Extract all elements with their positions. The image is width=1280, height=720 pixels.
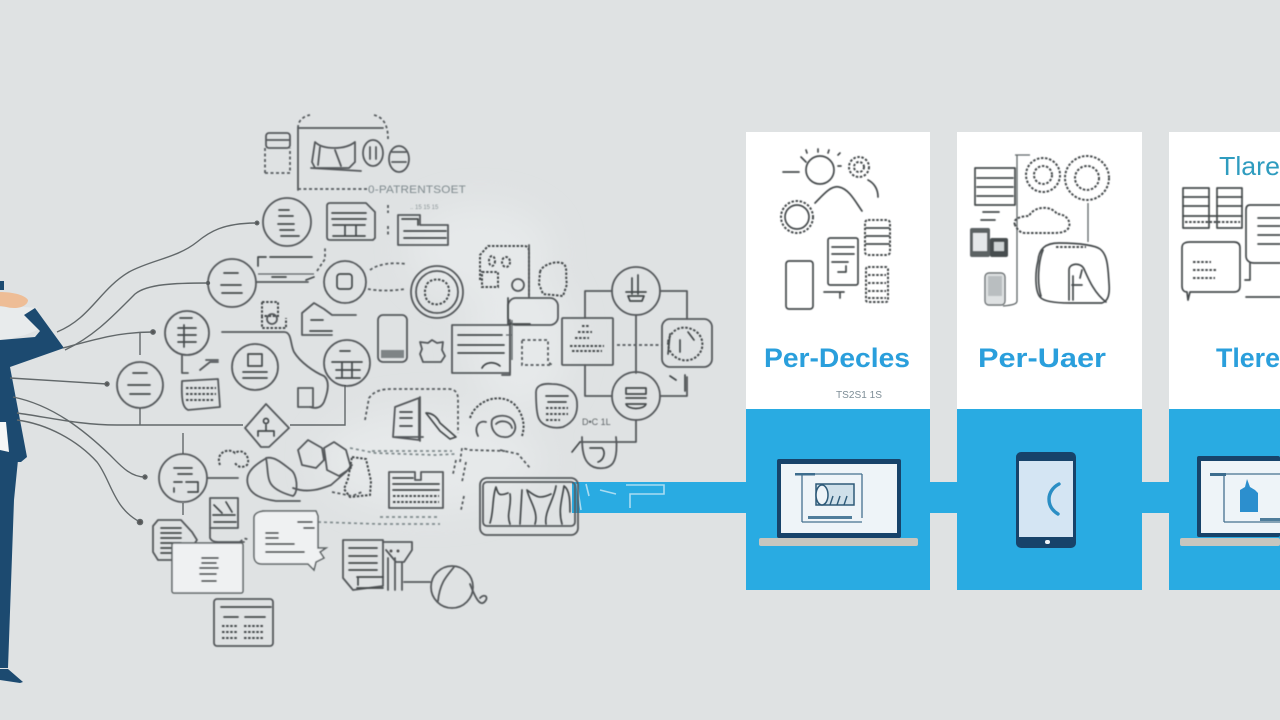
circle node: 232,283	[208, 259, 308, 307]
hand	[0, 292, 28, 308]
top title: Tlare: Tlare	[1219, 151, 1280, 181]
person	[0, 281, 64, 683]
sketch network	[117, 115, 712, 646]
circle node: 287,222	[263, 198, 311, 246]
text row	[258, 247, 325, 280]
heading: Per-Decles: Per-Decles	[764, 343, 910, 373]
hub links	[580, 291, 687, 442]
wires from person	[10, 221, 345, 525]
small caption: TS2S1 1S	[836, 390, 882, 401]
bottom card	[214, 599, 273, 646]
form node	[388, 205, 448, 245]
icon cup	[210, 498, 248, 542]
panel icons: tiered sketches	[1182, 188, 1280, 300]
panel icons: per-user sketches	[970, 155, 1109, 306]
shirt	[0, 422, 9, 452]
dashed links	[318, 448, 530, 524]
top cluster	[265, 115, 409, 190]
hair	[0, 281, 4, 290]
hub diagram	[562, 267, 712, 468]
panel: per-user	[957, 132, 1142, 590]
light sleeve area	[0, 307, 40, 341]
rounded tower	[378, 315, 407, 362]
small device	[200, 360, 218, 370]
circle node: 140,385	[117, 362, 163, 408]
octagon doc node	[153, 520, 197, 560]
hub blob square	[662, 319, 712, 367]
shoe	[0, 669, 23, 683]
heading: Per-Uaer: Per-Uaer	[978, 343, 1107, 373]
connector band	[572, 482, 1280, 513]
keyboard card	[182, 379, 220, 410]
jacket and arm	[0, 308, 64, 462]
dotted caption: .. 15 15 15	[410, 205, 439, 211]
ball icon	[404, 566, 487, 608]
panel: per-device	[746, 132, 930, 590]
list panel	[452, 320, 510, 375]
trousers	[0, 460, 18, 668]
plant frame	[480, 478, 578, 535]
dotted caption	[298, 184, 466, 211]
icon: laptop with chart	[1180, 456, 1280, 546]
dashed rect	[522, 340, 552, 365]
wire from nodes	[222, 332, 328, 408]
panel icons: per-device sketches	[781, 149, 890, 309]
top-left pale connector	[506, 320, 512, 360]
hub text square	[562, 318, 613, 365]
circle node: 345,282	[324, 261, 406, 303]
page icon	[298, 388, 313, 407]
right frame icon: book and ladder	[365, 389, 458, 441]
panel: tiered	[1169, 132, 1280, 590]
heading: Tlere: Tlere	[1216, 343, 1280, 373]
hub bottom circle	[612, 372, 660, 420]
circle node: 347,363	[324, 340, 370, 386]
blob	[420, 340, 445, 362]
dotted caption: 0-PATRENTSOET	[368, 184, 466, 196]
double ring node	[411, 266, 463, 318]
white card	[172, 543, 243, 593]
curly icon	[219, 451, 248, 467]
speech bubble	[254, 511, 326, 570]
rounded square with blob	[508, 298, 558, 325]
diamond node	[245, 404, 289, 447]
blob: 551,285	[539, 262, 567, 296]
circle node: 183,478	[159, 454, 238, 502]
rounded rect	[536, 384, 577, 428]
pot icon: D•C 1L	[582, 417, 611, 427]
small devices	[262, 302, 356, 335]
circle node: 187,333	[165, 311, 209, 373]
form block	[389, 472, 443, 508]
hub ship circle	[612, 267, 660, 315]
pot icon	[572, 417, 617, 468]
top right dashed frame	[480, 245, 529, 297]
blob cluster	[247, 440, 371, 501]
document icon	[343, 540, 412, 590]
circle node: 255,367	[232, 344, 278, 390]
arc icon	[470, 398, 524, 437]
icon: laptop	[759, 459, 918, 546]
icon: phone	[1016, 452, 1076, 548]
table node	[327, 203, 375, 240]
